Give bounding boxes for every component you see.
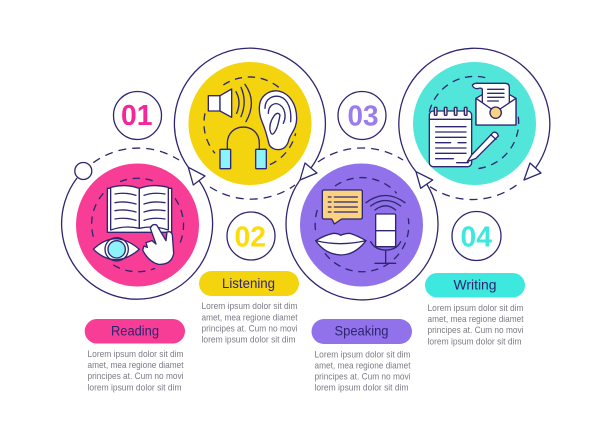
pill: Speaking [312, 319, 412, 344]
pill: Reading [85, 319, 185, 344]
step 1: reading [62, 148, 213, 299]
text: Speaking description: principes at. Cum no movi [314, 371, 410, 381]
text: Writing description: lorem ipsum dolor sit dim [428, 336, 522, 346]
arrow: writing [524, 163, 541, 180]
icon: speech bubble, lips and microphone [315, 178, 409, 272]
arrow: listening [300, 163, 317, 180]
pill: Speaking: Speaking [334, 322, 388, 338]
number: 04 [452, 212, 501, 260]
disc: listening [188, 62, 312, 185]
number: 03: 03 [348, 100, 378, 132]
ring: speaking [286, 148, 438, 300]
text: Reading description [88, 349, 184, 392]
arrow: speaking [416, 172, 433, 188]
text: Reading description: principes at. Cum no movi [88, 371, 184, 381]
text: Writing description: principes at. Cum no movi [428, 325, 524, 335]
step 4: writing [399, 48, 550, 200]
number: 02: 02 [234, 222, 266, 254]
text: Writing description: amet, mea regione diamet [428, 314, 524, 324]
disc: speaking [300, 164, 423, 286]
arrow: reading [188, 167, 205, 185]
ring: reading [62, 148, 213, 299]
text: Reading description: amet, mea regione diamet [88, 360, 184, 370]
disc: reading [76, 164, 199, 286]
pill: Listening: Listening [222, 275, 275, 291]
pill: Writing [425, 273, 525, 298]
number: 02 [227, 212, 275, 260]
step 3: speaking [286, 148, 438, 300]
icon: speaker, ear and headphones [204, 77, 297, 169]
number: 04: 04 [460, 222, 492, 254]
pill: Reading: Reading [111, 322, 159, 338]
text: Listening description: amet, mea regione diamet [202, 312, 298, 322]
text: Speaking description: lorem ipsum dolor sit dim [314, 382, 409, 392]
text: Listening description [202, 301, 298, 344]
ring: writing [399, 48, 550, 200]
pill: Listening [199, 271, 299, 296]
number: 01 [114, 92, 162, 140]
number: 01: 01 [121, 100, 152, 132]
text: Speaking description [314, 349, 411, 392]
text: Listening description: principes at. Cum no movi [202, 323, 298, 333]
icon: letter, notebook and pencil [429, 76, 519, 169]
step 2: listening [174, 48, 325, 199]
text: Speaking description: amet, mea regione diamet [314, 360, 411, 370]
text: Listening description: Lorem ipsum dolor sit dim [202, 301, 298, 311]
icon: book, eye and hand [92, 178, 184, 272]
text: Writing description: Lorem ipsum dolor sit dim [428, 303, 524, 313]
disc: writing [413, 62, 536, 185]
text: Listening description: lorem ipsum dolor sit dim [202, 334, 296, 344]
text: Speaking description: Lorem ipsum dolor sit dim [314, 349, 411, 359]
ring: listening [174, 48, 325, 199]
text: Reading description: lorem ipsum dolor sit dim [88, 382, 182, 392]
pill: Writing: Writing [454, 277, 496, 293]
text: Writing description [428, 303, 524, 346]
text: Reading description: Lorem ipsum dolor sit dim [88, 349, 184, 359]
number: 03 [338, 92, 386, 140]
